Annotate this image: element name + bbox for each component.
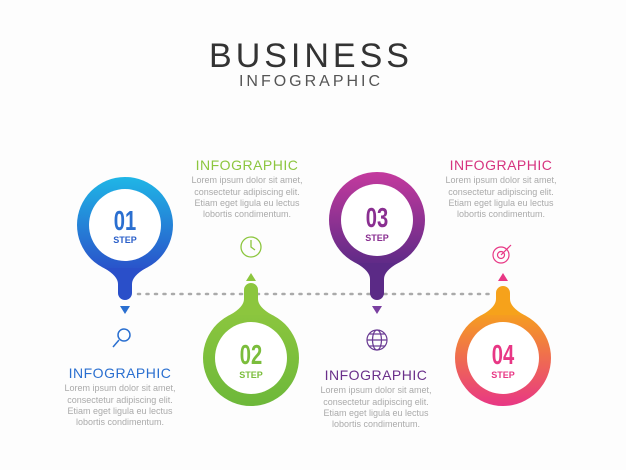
text block: step 1: lobortis condimentum. — [76, 417, 164, 427]
text block: step 1 — [64, 365, 176, 427]
pin 3 — [329, 172, 425, 300]
text block: step 2: lobortis condimentum. — [203, 209, 291, 219]
arrow: step 1 — [120, 306, 130, 314]
icon: clock — [241, 237, 261, 257]
text block: step 2: INFOGRAPHIC — [196, 157, 298, 173]
icon: target — [493, 245, 511, 263]
pin 2: 02 — [240, 340, 262, 371]
pin 1: STEP — [113, 235, 137, 245]
dotted timeline — [138, 293, 495, 295]
text block: step 3: Lorem ipsum dolor sit amet, — [320, 385, 432, 395]
title: INFOGRAPHIC — [239, 73, 383, 90]
text block: step 3: INFOGRAPHIC — [325, 367, 427, 383]
text block: step 1: Lorem ipsum dolor sit amet, — [64, 383, 176, 393]
pin 2 — [203, 283, 299, 406]
pin 3: 03 — [366, 203, 388, 234]
text block: step 2: Etiam eget ligula eu lectus — [194, 198, 300, 208]
text block: step 4: Lorem ipsum dolor sit amet, — [445, 175, 557, 185]
pin 2: STEP — [239, 370, 263, 380]
text block: step 3: consectetur adipiscing elit. — [323, 397, 429, 407]
text block: step 4: INFOGRAPHIC — [450, 157, 552, 173]
text block: step 4: Etiam eget ligula eu lectus — [448, 198, 554, 208]
arrow: step 2 — [246, 273, 256, 281]
text block: step 3 — [320, 367, 432, 429]
text block: step 2 — [191, 157, 303, 219]
pin 1 — [77, 177, 173, 300]
icon: magnifier — [113, 329, 130, 347]
text block: step 1: INFOGRAPHIC — [69, 365, 171, 381]
pin 4 — [455, 286, 551, 406]
pin 4: STEP — [491, 370, 515, 380]
pin 4: 04 — [492, 340, 515, 371]
text block: step 4: lobortis condimentum. — [457, 209, 545, 219]
text block: step 3: Etiam eget ligula eu lectus — [323, 408, 429, 418]
arrow: step 4 — [498, 273, 508, 281]
text block: step 2: Lorem ipsum dolor sit amet, — [191, 175, 303, 185]
text block: step 3: lobortis condimentum. — [332, 419, 420, 429]
arrow: step 3 — [372, 306, 382, 314]
text block: step 4 — [445, 157, 557, 219]
title: BUSINESS — [209, 37, 413, 75]
text block: step 4: consectetur adipiscing elit. — [448, 187, 554, 197]
icon: globe — [367, 330, 387, 350]
text block: step 1: Etiam eget ligula eu lectus — [67, 406, 173, 416]
pin 3: STEP — [365, 233, 389, 243]
text block: step 1: consectetur adipiscing elit. — [67, 395, 173, 405]
pin 1: 01 — [114, 206, 136, 237]
text block: step 2: consectetur adipiscing elit. — [194, 187, 300, 197]
